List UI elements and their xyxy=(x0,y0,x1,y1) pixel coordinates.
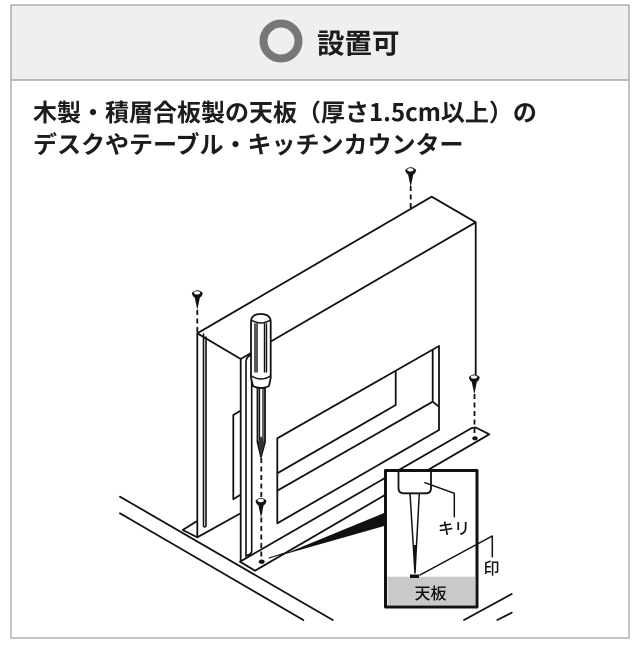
dashed guide lines xyxy=(197,186,475,558)
label: awl: キリ xyxy=(438,515,470,539)
inset: drill detail xyxy=(386,470,492,607)
inset: awl tip xyxy=(398,471,431,574)
icon: screw right xyxy=(469,375,480,394)
heading: installable: 設置可 xyxy=(317,21,400,61)
icon: screwdriver xyxy=(251,314,271,457)
illustration: installation diagram xyxy=(120,167,512,620)
icon: screw left xyxy=(192,290,203,310)
screw hole: front plate xyxy=(259,560,265,564)
label: tabletop: 天板 xyxy=(414,580,447,604)
text block: suitable surfaces: デスクやテーブル・キッチンカウンター xyxy=(33,125,464,160)
left foot plate xyxy=(183,514,239,537)
icon: circle mark xyxy=(264,24,298,58)
icon: screw top xyxy=(405,167,416,187)
callout wedge xyxy=(269,513,384,558)
leader: mark xyxy=(420,536,492,575)
text block: suitable surfaces: 木製・積層合板製の天板（厚さ1.5cm以上）の xyxy=(33,93,537,128)
icon: screw front xyxy=(256,498,266,518)
leader: awl xyxy=(425,483,454,517)
desk edge lines xyxy=(120,497,512,620)
panel: header band xyxy=(11,6,629,80)
right foot plate xyxy=(240,428,489,571)
screw hole: right plate xyxy=(472,436,478,440)
wall box body xyxy=(197,197,476,562)
inset: pencil mark xyxy=(410,574,419,578)
inset: tabletop band xyxy=(388,577,475,605)
text block: suitable surfaces xyxy=(33,93,537,160)
label: mark: 印 xyxy=(484,555,500,579)
box front opening xyxy=(277,346,439,523)
